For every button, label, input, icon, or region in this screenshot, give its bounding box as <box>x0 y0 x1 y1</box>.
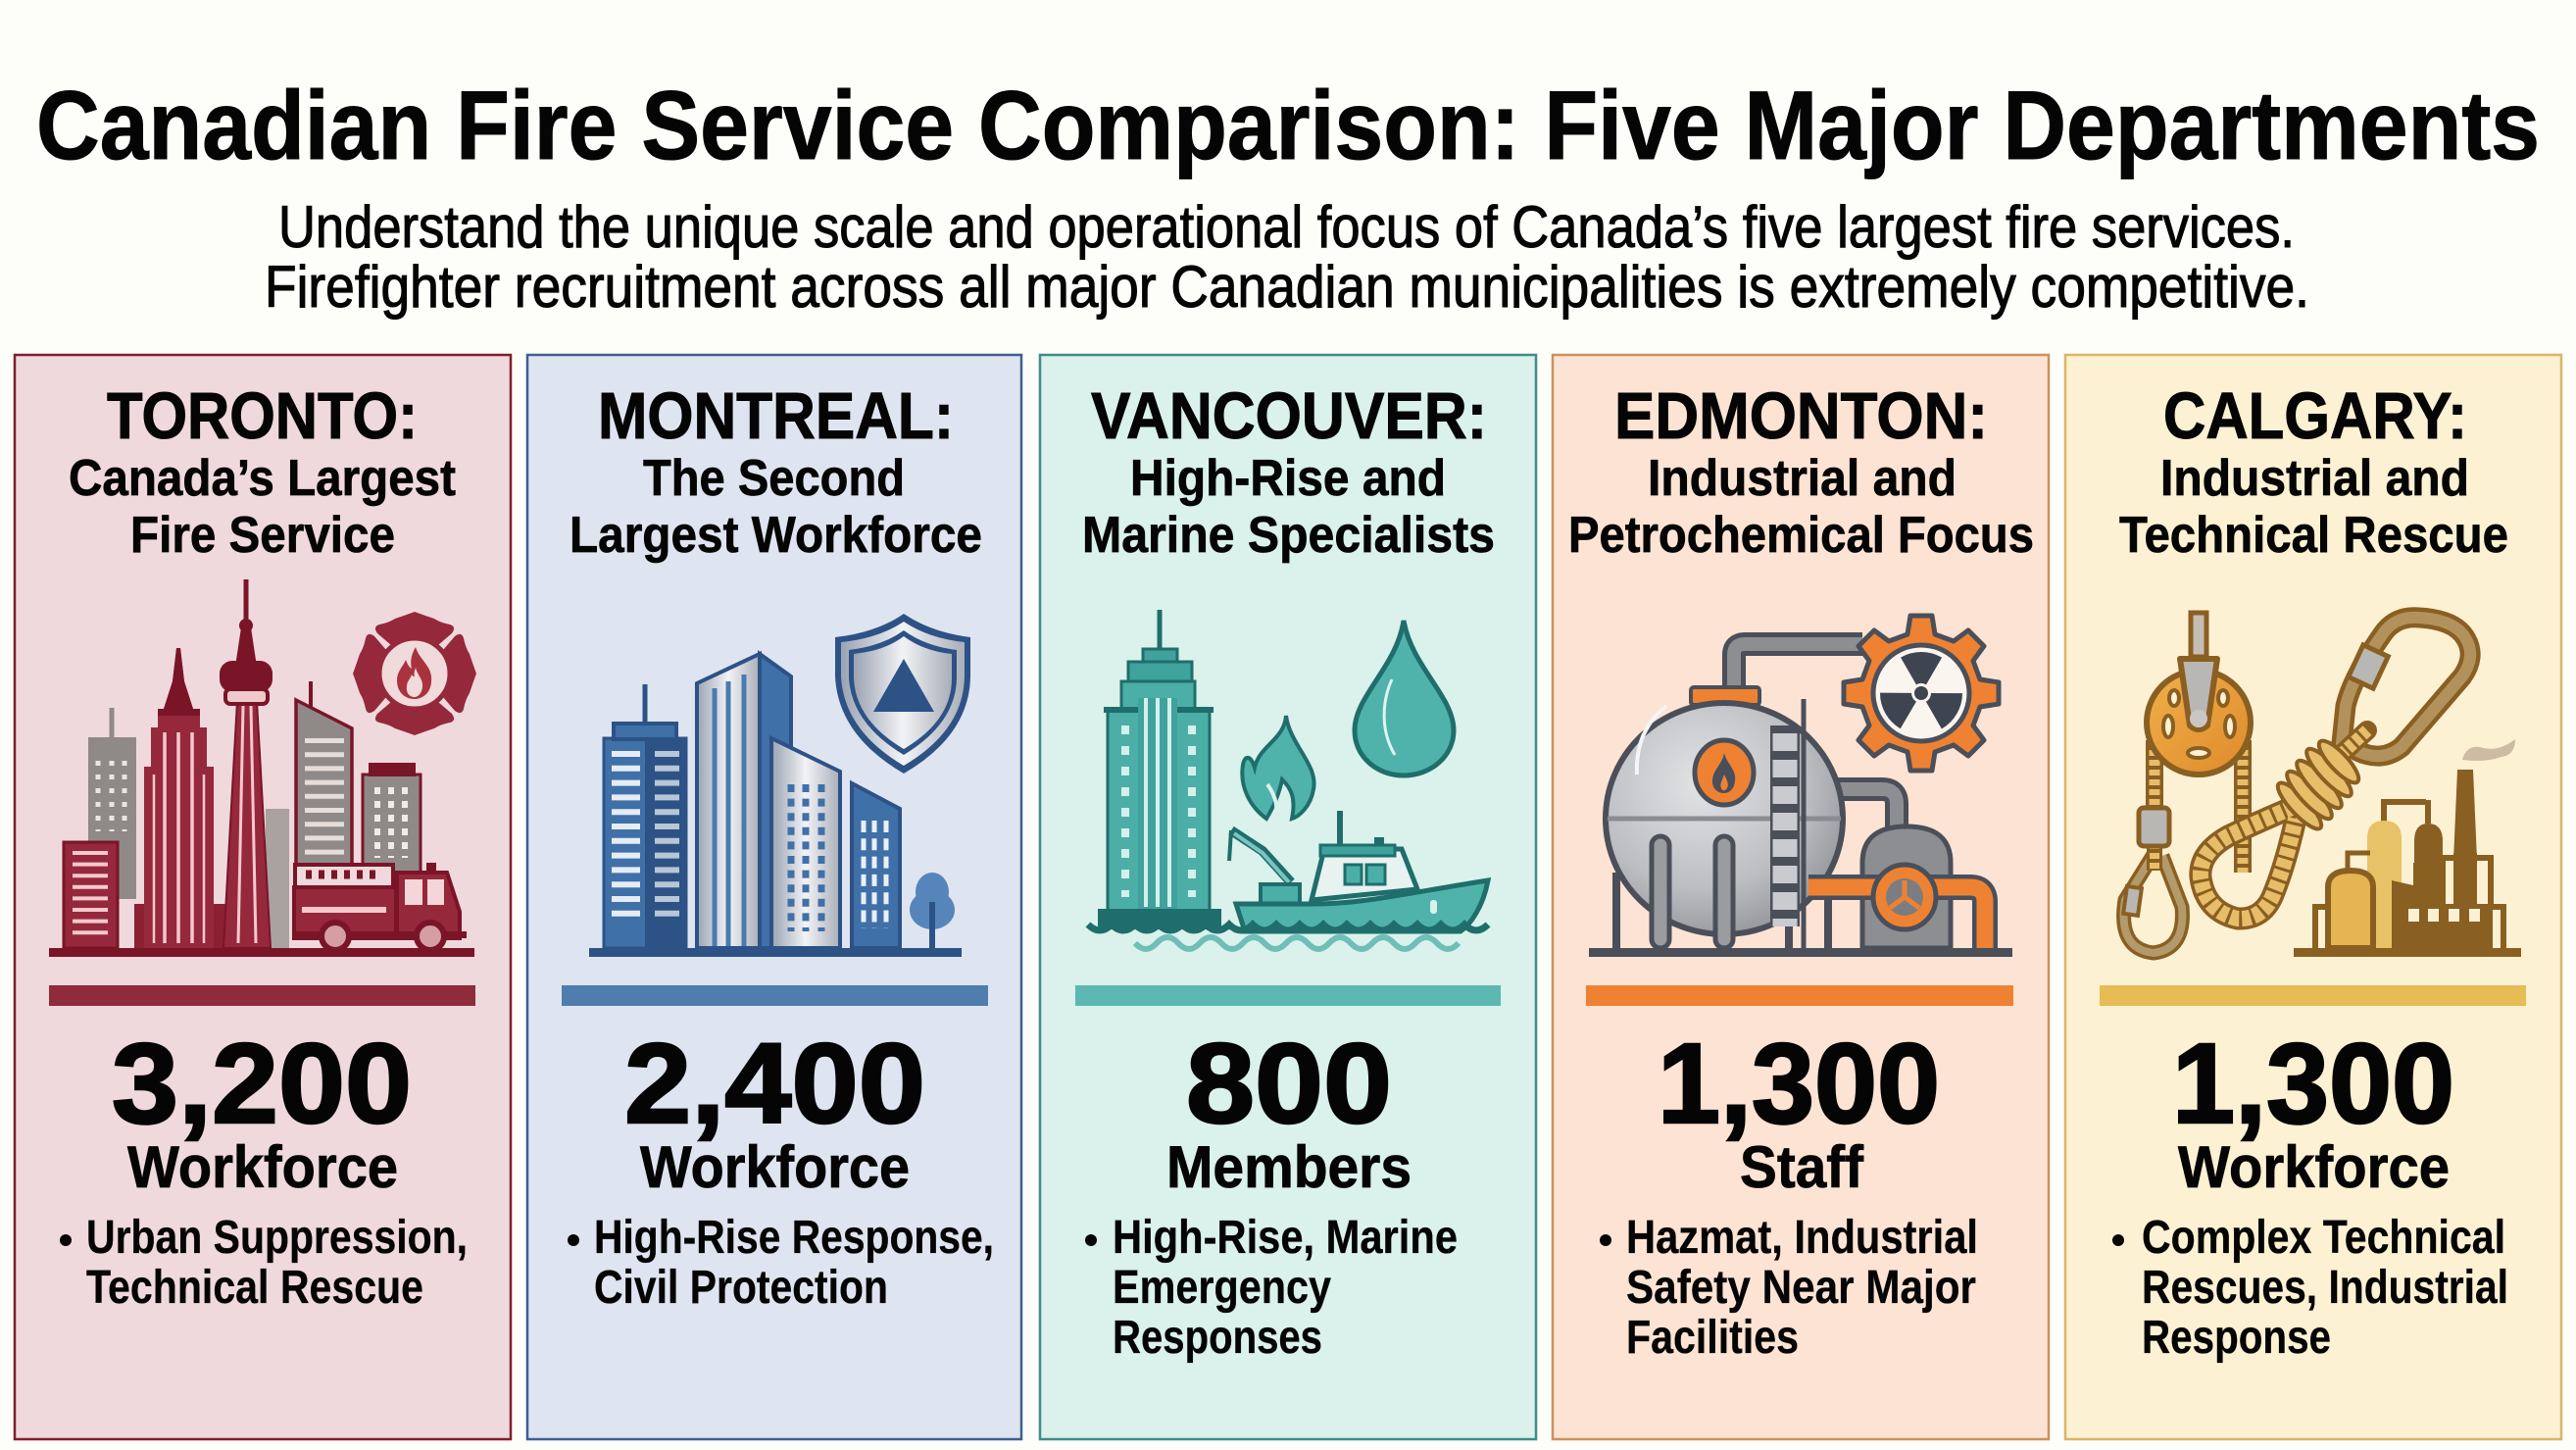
heading: Montreal: MONTREAL: <box>598 379 954 453</box>
label: Edmonton staff: Staff <box>1740 1134 1864 1200</box>
bullet list: Calgary: Complex Technical <box>2142 1212 2505 1264</box>
heading: Toronto <box>69 379 456 564</box>
bullet list: Vancouver: High-Rise, Marine <box>1113 1212 1458 1264</box>
bullet list: Montreal: Civil Protection <box>594 1262 888 1314</box>
heading: Montreal <box>570 379 982 564</box>
stat: Calgary 1,300: 1,300 <box>2172 1020 2454 1147</box>
heading: Montreal: Largest Workforce <box>570 507 982 564</box>
bullet list: Toronto: Urban Suppression, <box>86 1212 468 1264</box>
panel: Vancouver <box>1040 355 1536 1439</box>
divider: Toronto <box>49 985 475 1006</box>
heading: Edmonton: Petrochemical Focus <box>1568 507 2034 564</box>
label: Vancouver members: Members <box>1166 1134 1412 1200</box>
heading: Edmonton: Industrial and <box>1648 450 1957 507</box>
bullet list: Edmonton <box>1600 1212 1978 1364</box>
bullet list: Edmonton: Hazmat, Industrial <box>1626 1212 1978 1264</box>
icon: Montreal towers and shield <box>589 614 970 957</box>
stat: Toronto 3,200: 3,200 <box>112 1020 412 1147</box>
heading: Vancouver <box>1082 379 1495 564</box>
heading: Toronto: Fire Service <box>130 507 395 564</box>
icon: Toronto skyline with fire truck and badge <box>49 579 476 957</box>
divider: Vancouver <box>1075 985 1501 1006</box>
icon: Vancouver tower, flame, water drop and boat <box>1088 610 1488 949</box>
bullet list: Vancouver <box>1085 1212 1458 1364</box>
bullet list: Calgary: Rescues, Industrial <box>2142 1262 2508 1314</box>
heading: Toronto: TORONTO: <box>107 379 418 453</box>
divider: Montreal <box>562 985 988 1006</box>
heading: Vancouver: VANCOUVER: <box>1091 379 1487 453</box>
heading: Edmonton <box>1568 379 2034 564</box>
panel: Edmonton <box>1553 355 2049 1439</box>
panel: Calgary <box>2065 355 2561 1439</box>
bullet list: Montreal: High-Rise Response, <box>594 1212 994 1264</box>
heading: Calgary: Technical Rescue <box>2119 507 2508 564</box>
heading: Calgary: Industrial and <box>2160 450 2469 507</box>
label: Montreal workforce: Workforce <box>640 1134 910 1200</box>
divider: Edmonton <box>1586 985 2013 1006</box>
heading: Toronto: Canada’s Largest <box>69 450 456 507</box>
bullet list: Toronto: Technical Rescue <box>86 1262 423 1314</box>
bullet list: Edmonton: Facilities <box>1626 1312 1799 1364</box>
heading: Montreal: The Second <box>643 450 905 507</box>
bullet list: Montreal <box>568 1212 994 1314</box>
heading: Vancouver: High-Rise and <box>1130 450 1446 507</box>
icon: Calgary pulley, rope, carabiner and refinery <box>2123 613 2521 957</box>
stat: Montreal 2,400: 2,400 <box>624 1020 925 1147</box>
heading: Calgary: CALGARY: <box>2163 379 2467 453</box>
bullet list: Toronto <box>60 1212 468 1314</box>
stat: Edmonton 1,300: 1,300 <box>1658 1020 1940 1147</box>
heading: Edmonton: EDMONTON: <box>1614 379 1988 453</box>
subtitle <box>265 194 2309 320</box>
bullet list: Calgary: Response <box>2142 1312 2331 1364</box>
label: Toronto workforce: Workforce <box>127 1134 398 1200</box>
bullet list: Vancouver: Emergency <box>1113 1262 1331 1314</box>
bullet list: Vancouver: Responses <box>1113 1312 1322 1364</box>
icon: Edmonton storage tank, pipes and gear <box>1589 616 2012 957</box>
label: Calgary workforce: Workforce <box>2178 1134 2450 1200</box>
heading: Calgary <box>2119 379 2508 564</box>
bullet list: Edmonton: Safety Near Major <box>1626 1262 1976 1314</box>
divider: Calgary <box>2100 985 2526 1006</box>
bullet list: Calgary <box>2112 1212 2508 1364</box>
subtitle: Firefighter recruitment across all major Canadian municipalities is extremely competitive. <box>265 254 2309 320</box>
stat: Vancouver 800: 800 <box>1186 1020 1392 1147</box>
panel: Montreal <box>527 355 1021 1439</box>
panel: Toronto <box>15 355 511 1439</box>
heading: Vancouver: Marine Specialists <box>1082 507 1495 564</box>
subtitle: Understand the unique scale and operational focus of Canada’s five largest fire services. <box>278 194 2295 260</box>
